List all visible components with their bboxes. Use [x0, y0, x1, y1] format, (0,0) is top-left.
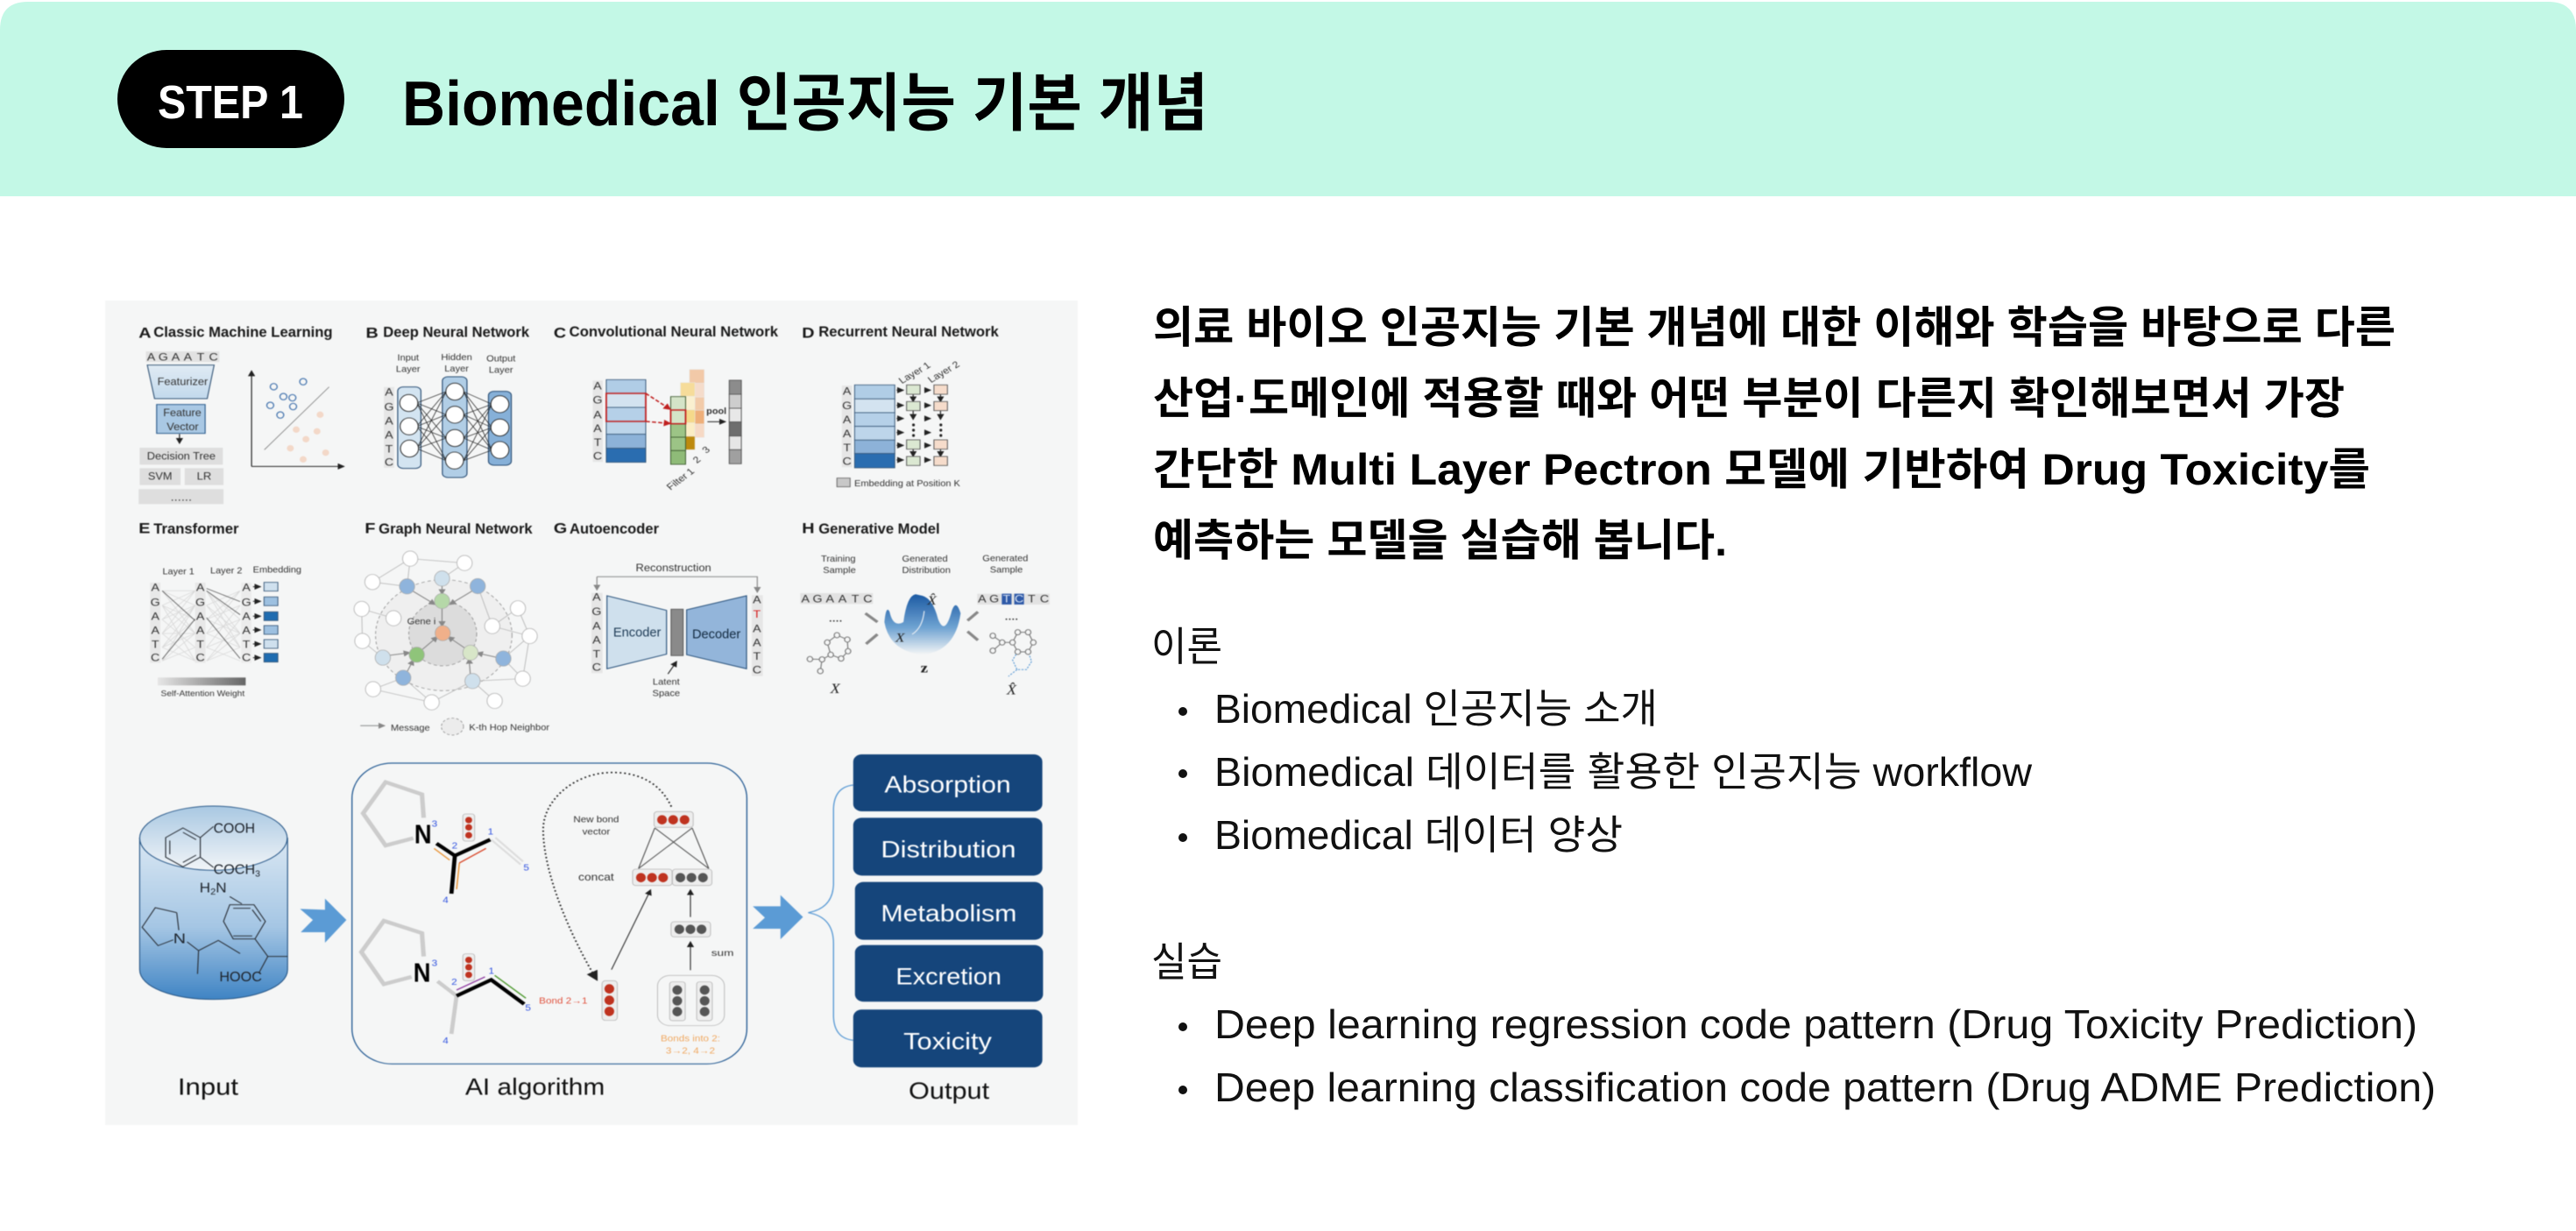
diagram G: autoencoder: A — [592, 620, 601, 632]
intro paragraph: 산업·도메인에 적용할 때와 어떤 부분이 다른지 확인해보면서 가장 — [1153, 374, 2345, 423]
diagram E: transformer: C — [151, 652, 159, 663]
diagram B: deep neural network: A — [385, 428, 393, 441]
diagram H: generative model: X — [830, 681, 841, 697]
diagram H: generative model: G — [989, 593, 999, 605]
intro paragraph: 예측하는 모델을 실습해 봅니다. — [1153, 516, 1727, 565]
diagram A: classic machine learning: C — [209, 351, 218, 363]
AI algorithm: message passing box: concat — [578, 871, 614, 883]
diagram H: generative model: Sample — [990, 565, 1023, 575]
diagram D: recurrent neural network: A — [843, 386, 852, 397]
AI algorithm: message passing box: 5 — [523, 863, 529, 873]
diagram E: transformer: Transformer — [153, 520, 238, 537]
diagram H: generative model: H — [802, 520, 815, 536]
diagram D: recurrent neural network: Recurrent Neural Network — [818, 322, 1000, 340]
diagram E: transformer: A — [196, 610, 205, 622]
diagram B: deep neural network: G — [384, 400, 394, 413]
arrow: algorithm to output — [753, 895, 803, 939]
diagram A: classic machine learning: G — [159, 351, 168, 363]
diagram A: classic machine learning: A — [172, 351, 180, 363]
diagram B: deep neural network: Layer — [444, 364, 469, 374]
diagram E: transformer: A — [242, 582, 251, 593]
AI algorithm: vector aggregation: 3→2, 4→2 — [666, 1046, 715, 1056]
input: molecule database cylinder: 2 — [210, 888, 216, 897]
diagram H: generative model: Generated — [902, 555, 948, 564]
diagram G: autoencoder: T — [754, 608, 761, 620]
diagram G: autoencoder: Space — [653, 689, 680, 698]
output: ADME and toxicity list — [808, 754, 1043, 1104]
theory section: Biomedical 인공지능 소개 — [1214, 686, 1658, 732]
diagram G: autoencoder: T — [754, 650, 761, 662]
diagram B: deep neural network: Deep Neural Network — [383, 323, 530, 340]
diagram G: autoencoder: C — [592, 661, 601, 673]
diagram H: generative model: T — [1028, 593, 1036, 605]
diagram G: autoencoder: A — [753, 622, 761, 634]
AI algorithm: message passing box: 1 — [488, 827, 493, 837]
theory section: 이론 — [1151, 624, 1222, 669]
diagram F: graph neural network: F — [364, 520, 375, 536]
diagram H: generative model: Training — [821, 555, 856, 564]
step badge: STEP 1 — [158, 76, 303, 129]
diagram B: deep neural network: Output — [486, 354, 516, 364]
diagram C: convolutional neural network: A — [593, 408, 602, 421]
AI algorithm: vector aggregation: Bonds into 2: — [661, 1034, 720, 1044]
input: molecule database cylinder: H — [200, 881, 211, 895]
input: molecule database cylinder: HOOC — [219, 969, 262, 985]
diagram E: transformer: G — [151, 596, 160, 608]
diagram C: convolutional neural network: T — [594, 436, 601, 449]
diagram C: convolutional neural network: pool — [706, 407, 726, 416]
diagram D: recurrent neural network: A — [843, 414, 852, 426]
output: ADME and toxicity list: Metabolism — [881, 902, 1016, 927]
diagram H: generative model: Distribution — [902, 566, 951, 576]
diagram E: transformer: C — [242, 652, 251, 663]
diagram G: autoencoder: Encoder — [613, 626, 662, 640]
AI algorithm: message passing box: 4 — [442, 895, 449, 905]
diagram A: classic machine learning: A — [138, 324, 152, 341]
AI algorithm: message passing box: 2 — [452, 841, 457, 851]
practice section: 실습 — [1151, 939, 1222, 985]
diagram A: classic machine learning: Feature — [163, 407, 202, 419]
diagram H: generative model: .... — [829, 614, 842, 624]
output: ADME and toxicity list: Output — [909, 1079, 989, 1104]
diagram E: transformer: Embedding — [253, 565, 301, 575]
diagram A: classic machine learning: T — [197, 351, 204, 363]
diagram D: recurrent neural network: Layer 2 — [926, 360, 962, 385]
diagram G: autoencoder: Latent — [653, 677, 681, 687]
diagram E: transformer: A — [242, 610, 251, 622]
diagram E: transformer: T — [243, 638, 251, 650]
diagram G: autoencoder: G — [554, 520, 567, 536]
input: molecule database cylinder — [139, 806, 287, 1100]
diagram G: autoencoder — [554, 520, 763, 698]
AI algorithm: message passing box: N — [414, 820, 432, 850]
diagram H: generative model: Generated — [982, 554, 1028, 563]
AI algorithm: vector aggregation — [612, 811, 733, 1056]
header banner — [0, 2, 2576, 196]
panel: model diagrams image — [105, 301, 1078, 1125]
diagram F: graph neural network: Message — [391, 724, 430, 733]
AI algorithm: message passing box: N — [414, 959, 430, 988]
diagram H: generative model: A — [826, 592, 834, 605]
diagram B: deep neural network: Hidden — [441, 353, 472, 363]
diagram C: convolutional neural network: G — [593, 394, 603, 406]
input: molecule database cylinder: COOH — [214, 821, 255, 836]
AI algorithm: message passing box: New bond — [573, 815, 619, 824]
intro paragraph: 의료 바이오 인공지능 기본 개념에 대한 이해와 학습을 바탕으로 다른 — [1153, 303, 2396, 352]
diagram G: autoencoder: A — [753, 636, 761, 648]
diagram G: autoencoder: G — [591, 605, 601, 618]
diagram C: convolutional neural network: A — [593, 380, 602, 392]
diagram E: transformer: G — [195, 596, 205, 608]
AI algorithm: message passing box: 3 — [432, 959, 437, 968]
diagram E: transformer: A — [196, 624, 205, 636]
diagram H: generative model: T — [852, 592, 860, 605]
diagram E: transformer: T — [196, 638, 204, 650]
theory section — [1151, 624, 2033, 858]
practice section: Deep learning classification code pattern (Drug ADME Prediction) — [1214, 1065, 2436, 1110]
diagram F: graph neural network: K-th Hop Neighbor — [469, 723, 549, 732]
diagram A: classic machine learning — [138, 323, 344, 504]
diagram H: generative model: A — [978, 593, 987, 605]
diagram C: convolutional neural network: C — [554, 324, 566, 341]
diagram G: autoencoder: T — [593, 647, 600, 660]
diagram D: recurrent neural network: G — [842, 400, 852, 412]
diagram C: convolutional neural network: 2 — [691, 455, 704, 465]
intro paragraph — [1153, 303, 2396, 565]
diagram B: deep neural network: Layer — [489, 365, 513, 375]
diagram A: classic machine learning: ...... — [171, 492, 192, 503]
input: molecule database cylinder: Input — [178, 1075, 238, 1100]
diagram B: deep neural network: Layer — [396, 364, 421, 374]
diagram G: autoencoder: A — [592, 591, 601, 603]
intro paragraph: 간단한 Multi Layer Pectron 모델에 기반하여 Drug Toxicity를 — [1153, 445, 2370, 494]
practice section — [1151, 939, 2436, 1110]
diagram C: convolutional neural network: Filter 1 — [665, 467, 697, 492]
diagram F: graph neural network: Gene i — [407, 617, 435, 626]
diagram H: generative model: Generative Model — [818, 520, 940, 537]
diagram D: recurrent neural network: D — [802, 324, 815, 341]
diagram G: autoencoder: Autoencoder — [570, 520, 659, 537]
diagram G: autoencoder: A — [753, 594, 761, 605]
diagram G: autoencoder: C — [753, 664, 761, 676]
diagram E: transformer: A — [196, 582, 205, 593]
AI algorithm: message passing box — [352, 763, 747, 1100]
AI algorithm: message passing box: AI algorithm — [465, 1075, 605, 1100]
diagram C: convolutional neural network: Convolutional Neural Network — [570, 322, 779, 340]
input: molecule database cylinder: N — [173, 931, 186, 946]
diagram E: transformer: A — [151, 624, 159, 636]
diagram E: transformer — [138, 520, 301, 698]
diagram H: generative model: X — [895, 632, 906, 645]
diagram D: recurrent neural network: T — [843, 442, 851, 454]
theory section: Biomedical 데이터를 활용한 인공지능 workflow — [1214, 749, 2033, 795]
diagram D: recurrent neural network — [802, 322, 1000, 489]
diagram G: autoencoder: A — [592, 633, 601, 646]
diagram E: transformer: G — [242, 596, 251, 608]
AI algorithm: message passing box: vector — [583, 827, 610, 837]
diagram A: classic machine learning: LR — [197, 470, 211, 482]
diagram H: generative model: C — [1040, 593, 1049, 605]
AI algorithm: message passing box: 3 — [432, 819, 437, 829]
diagram E: transformer: A — [151, 610, 159, 622]
diagram A: classic machine learning: SVM — [148, 470, 173, 482]
output: ADME and toxicity list: Absorption — [884, 773, 1011, 798]
diagram H: generative model: A — [801, 592, 810, 605]
diagram E: transformer: Layer 2 — [210, 566, 242, 576]
diagram H: generative model — [800, 520, 1050, 697]
title: Biomedical 인공지능 기본 개념 — [402, 69, 1208, 139]
diagram H: generative model: z — [921, 660, 928, 676]
arrow: input to algorithm — [300, 899, 346, 943]
diagram B: deep neural network: A — [385, 414, 393, 427]
diagram C: convolutional neural network: C — [593, 450, 602, 462]
diagram G: autoencoder: Reconstruction — [636, 562, 711, 574]
AI algorithm: message passing box: 4 — [442, 1036, 449, 1046]
diagram E: transformer: A — [151, 582, 159, 593]
diagram H: generative model: Sample — [823, 566, 856, 576]
diagram E: transformer: T — [152, 638, 159, 650]
diagram B: deep neural network — [366, 323, 530, 478]
theory section: Biomedical 데이터 양상 — [1214, 812, 1623, 858]
output: ADME and toxicity list: Excretion — [895, 965, 1001, 990]
AI algorithm: message passing box: Bond 2→1 — [539, 996, 588, 1006]
practice section: Deep learning regression code pattern (Drug Toxicity Prediction) — [1214, 1001, 2417, 1047]
diagram H: generative model: X̂ — [926, 593, 938, 608]
diagram A: classic machine learning: A — [147, 351, 155, 363]
AI algorithm: message passing box: 2 — [451, 978, 457, 987]
input: molecule database cylinder: COCH — [214, 862, 260, 877]
diagram D: recurrent neural network: Embedding at Position K — [854, 479, 960, 489]
diagram E: transformer: C — [195, 652, 205, 663]
diagram B: deep neural network: C — [385, 456, 393, 468]
input: molecule database cylinder: N — [216, 881, 227, 895]
diagram H: generative model: T — [1003, 593, 1010, 605]
diagram C: convolutional neural network: 3 — [701, 445, 712, 456]
diagram A: classic machine learning: Vector — [166, 421, 199, 433]
output: ADME and toxicity list: Distribution — [881, 838, 1016, 863]
diagram D: recurrent neural network: C — [843, 455, 852, 467]
diagram H: generative model: G — [813, 592, 823, 605]
diagram A: classic machine learning: Classic Machine Learning — [153, 323, 333, 340]
AI algorithm: vector aggregation: sum — [711, 949, 733, 959]
diagram E: transformer: Layer 1 — [163, 567, 195, 577]
diagram H: generative model: A — [839, 592, 847, 605]
diagram H: generative model: C — [863, 592, 873, 605]
AI algorithm: message passing box: 1 — [488, 966, 494, 976]
diagram G: autoencoder: Decoder — [692, 627, 741, 641]
diagram A: classic machine learning: Featurizer — [158, 375, 209, 387]
diagram D: recurrent neural network: A — [843, 428, 852, 440]
diagram H: generative model: C — [1015, 593, 1023, 605]
diagram B: deep neural network: B — [366, 324, 379, 341]
diagram H: generative model: X̂ — [1006, 683, 1017, 697]
diagram A: classic machine learning: Decision Tree — [147, 449, 216, 462]
diagram E: transformer: A — [242, 624, 251, 636]
diagram B: deep neural network: Input — [398, 353, 420, 363]
step badge — [117, 50, 344, 148]
diagram F: graph neural network: Graph Neural Network — [379, 520, 533, 537]
diagram F: graph neural network — [354, 520, 549, 735]
diagram D: recurrent neural network: Layer 1 — [897, 361, 933, 386]
diagram C: convolutional neural network — [554, 322, 779, 492]
diagram E: transformer: Self-Attention Weight — [161, 690, 244, 698]
input: molecule database cylinder: 3 — [255, 869, 260, 879]
diagram C: convolutional neural network: A — [593, 422, 602, 435]
diagram B: deep neural network: A — [385, 386, 393, 398]
diagram B: deep neural network: T — [386, 442, 393, 455]
diagram A: classic machine learning: A — [184, 351, 192, 363]
diagram H: generative model: .... — [1005, 612, 1018, 622]
diagram E: transformer: E — [138, 520, 150, 536]
AI algorithm: message passing box: 5 — [525, 1003, 531, 1013]
output: ADME and toxicity list: Toxicity — [903, 1029, 992, 1055]
